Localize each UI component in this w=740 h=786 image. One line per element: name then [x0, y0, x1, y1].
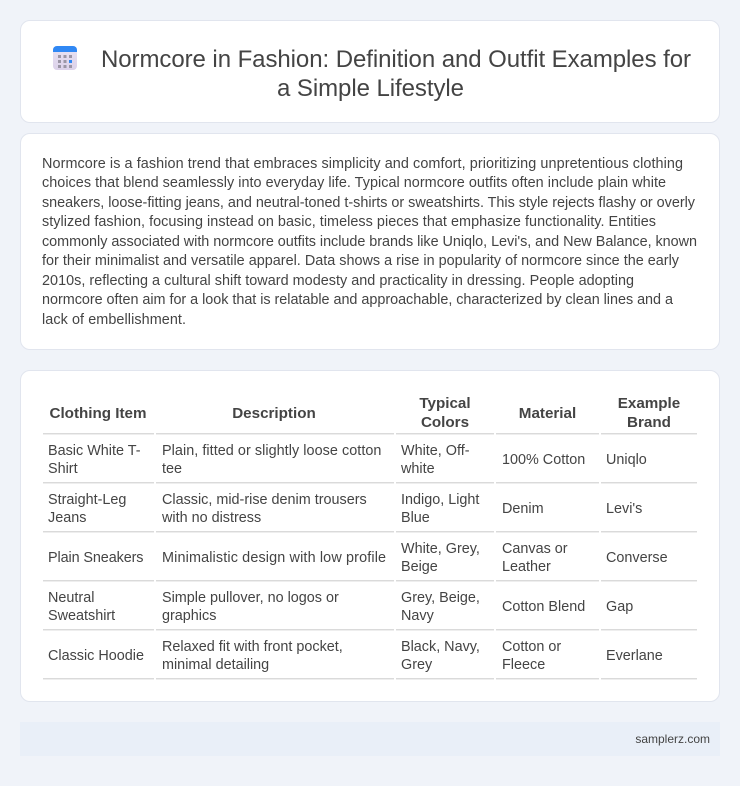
text block: normcore description: choices that blend seamlessly into everyday life. Typical normcore outfits often include plain white: [42, 175, 666, 191]
table row: Plain Sneakers: Minimalistic design with low profile: [162, 550, 386, 566]
table row: Basic White T-Shirt: Plain, fitted or slightly loose cotton: [162, 443, 381, 459]
table: normcore clothing items: [43, 395, 697, 680]
table row: Plain Sneakers: Leather: [502, 559, 551, 575]
text block: normcore description: commonly associated with normcore outfits include brands like Uniqlo, Levi's, and New Balance, known: [42, 234, 697, 250]
table row: Straight-Leg Jeans: Denim: [502, 501, 544, 517]
table row: Basic White T-Shirt: Shirt: [48, 461, 78, 477]
table row: Plain Sneakers: Converse: [606, 550, 668, 566]
text block: normcore description: stylized fashion, focusing instead on basic, timeless pieces that emphasize functionality. Entities: [42, 214, 656, 230]
table header: Clothing Item: [49, 405, 147, 422]
table row: Straight-Leg Jeans: Classic, mid-rise denim trousers: [162, 492, 367, 508]
panel: table card: [20, 370, 720, 702]
table row: Basic White T-Shirt: 100% Cotton: [502, 452, 585, 468]
icon: calendar: [53, 46, 77, 70]
table row: Straight-Leg Jeans: Straight-Leg: [48, 492, 126, 508]
table row: Straight-Leg Jeans: Indigo, Light: [401, 492, 479, 508]
table row: Neutral Sweatshirt: Sweatshirt: [48, 608, 115, 624]
title: a Simple Lifestyle: [277, 75, 464, 102]
table row: Classic Hoodie: Classic Hoodie: [48, 648, 144, 664]
title: Normcore in Fashion: Definition and Outfit Examples for: [101, 46, 691, 73]
table header: Description: [232, 405, 316, 422]
table row: Plain Sneakers: [48, 541, 668, 575]
text block: normcore description: [42, 156, 697, 328]
table row: Plain Sneakers: Canvas or: [502, 541, 568, 557]
table header: Brand: [627, 414, 671, 431]
table row: Classic Hoodie: minimal detailing: [162, 657, 269, 673]
table row: Basic White T-Shirt: white: [401, 461, 435, 477]
table header: [49, 395, 680, 431]
text block: normcore description: lack of embellishment.: [42, 312, 186, 328]
table row: Basic White T-Shirt: [48, 443, 647, 477]
text block: normcore description: for their minimalist and versatile apparel. Data shows a rise in popularity of normcore since the early: [42, 253, 680, 269]
table row: Neutral Sweatshirt: Simple pullover, no logos or: [162, 590, 339, 606]
table row: Basic White T-Shirt: White, Off-: [401, 443, 470, 459]
table row: Straight-Leg Jeans: Blue: [401, 510, 430, 526]
table header: Colors: [421, 414, 469, 431]
table row: Basic White T-Shirt: tee: [162, 461, 182, 477]
text block: normcore description: normcore often aim for a look that is relatable and approachable, characterized by clean lines and a: [42, 292, 673, 308]
table row: Basic White T-Shirt: Uniqlo: [606, 452, 647, 468]
panel: title card: [20, 20, 720, 123]
table row: Straight-Leg Jeans: with no distress: [162, 510, 261, 526]
table row: Straight-Leg Jeans: Levi's: [606, 501, 642, 517]
table row: Classic Hoodie: Relaxed fit with front pocket,: [162, 639, 343, 655]
table row: Classic Hoodie: [48, 639, 663, 673]
text block: normcore description: sneakers, loose-fitting jeans, and neutral-toned t-shirts or sweatshirts. This style rejects flashy or overly: [42, 195, 696, 211]
panel: summary text: [20, 133, 720, 350]
table row: Classic Hoodie: Black, Navy,: [401, 639, 480, 655]
table row: Classic Hoodie: Everlane: [606, 648, 663, 664]
table row: Plain Sneakers: White, Grey,: [401, 541, 480, 557]
table row: Classic Hoodie: Cotton or: [502, 639, 561, 655]
table row: Neutral Sweatshirt: Grey, Beige,: [401, 590, 480, 606]
table row: Neutral Sweatshirt: Cotton Blend: [502, 599, 585, 615]
table row: Classic Hoodie: Grey: [401, 657, 432, 673]
table row: Neutral Sweatshirt: Gap: [606, 599, 633, 615]
table row: Neutral Sweatshirt: [48, 590, 633, 624]
table row: Straight-Leg Jeans: [48, 492, 642, 526]
table row: Neutral Sweatshirt: Navy: [401, 608, 434, 624]
text block: normcore description: 2010s, reflecting a cultural shift toward modesty and practicality in dressing. People adopting: [42, 273, 634, 289]
table row: Neutral Sweatshirt: Neutral: [48, 590, 94, 606]
table row: Classic Hoodie: Fleece: [502, 657, 545, 673]
table row: Plain Sneakers: Beige: [401, 559, 438, 575]
footer bar: [20, 722, 720, 756]
table header: Material: [519, 405, 576, 422]
table row: Plain Sneakers: Plain Sneakers: [48, 550, 143, 566]
table header: Typical: [419, 395, 471, 412]
table row: Basic White T-Shirt: Basic White T-: [48, 443, 140, 459]
title: [101, 46, 691, 102]
table header: Example: [618, 395, 680, 412]
text block: normcore description: Normcore is a fashion trend that embraces simplicity and comfort, prioritizing unpretentious clothing: [42, 156, 683, 172]
table row: Neutral Sweatshirt: graphics: [162, 608, 216, 624]
footer text: samplerz.com: samplerz.com: [635, 732, 710, 746]
table row: Straight-Leg Jeans: Jeans: [48, 510, 86, 526]
